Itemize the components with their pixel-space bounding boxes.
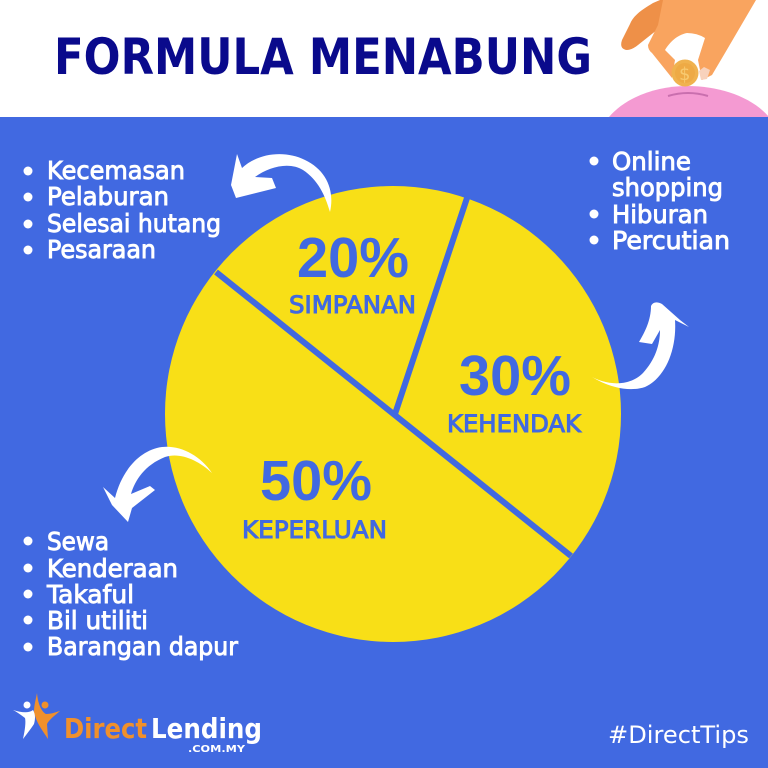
logo: DirectLending <box>13 693 262 755</box>
list: simpanan: Pesaraan <box>47 235 156 264</box>
list: keperluan: Barangan dapur <box>47 632 239 661</box>
label: 30% kehendak: KEHENDAK <box>447 410 582 438</box>
list: kehendak: shopping <box>612 173 723 202</box>
list: simpanan <box>24 156 221 264</box>
list: simpanan: Pelaburan <box>47 182 169 211</box>
list: keperluan <box>24 527 239 661</box>
arrow: to keperluan list <box>103 447 212 522</box>
arrow: to simpanan list <box>231 154 331 212</box>
label: 30% kehendak <box>447 344 582 438</box>
icon: hand dropping coin into piggy bank <box>609 0 768 117</box>
list: kehendak: Percutian <box>612 226 730 255</box>
hashtag: #DirectTips <box>608 721 749 749</box>
label: 50% keperluan: 50% <box>260 449 372 513</box>
logo: DirectLending: Lending <box>151 712 262 745</box>
label: 20% simpanan: 20% <box>297 226 409 290</box>
label: 20% simpanan: SIMPANAN <box>289 291 416 319</box>
label: 20% simpanan <box>289 226 416 319</box>
list: keperluan: Kenderaan <box>47 554 178 583</box>
label: 50% keperluan: KEPERLUAN <box>242 516 387 544</box>
list: keperluan: Bil utiliti <box>47 606 148 635</box>
header band <box>0 0 768 117</box>
list: kehendak: Hiburan <box>612 200 708 229</box>
list: kehendak <box>590 147 730 255</box>
label: 30% kehendak: 30% <box>459 344 571 408</box>
title: FORMULA MENABUNG <box>54 28 592 86</box>
list: simpanan: Selesai hutang <box>47 209 221 238</box>
icon: hand dropping coin into piggy bank: $ <box>679 64 690 85</box>
list: keperluan: Takaful <box>46 580 134 609</box>
logo: DirectLending: Direct <box>64 712 147 745</box>
pie chart <box>165 186 621 642</box>
list: keperluan: Sewa <box>47 527 109 556</box>
arrow: to kehendak list <box>592 302 689 389</box>
label: 50% keperluan <box>242 449 387 544</box>
list: kehendak: Online <box>612 147 691 176</box>
logo: DirectLending: .COM.MY <box>188 744 246 755</box>
list: simpanan: Kecemasan <box>47 156 185 185</box>
